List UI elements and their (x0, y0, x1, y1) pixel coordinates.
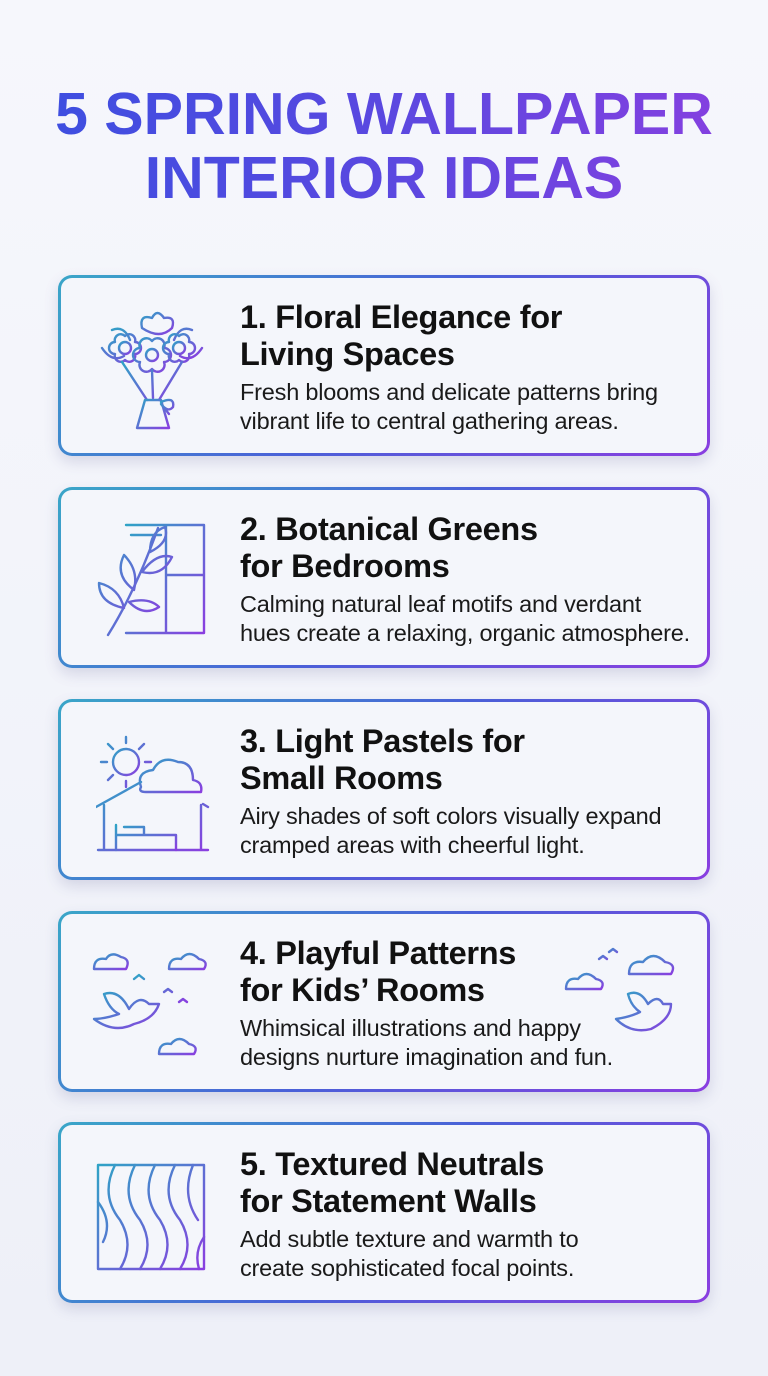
icon: sun cloud room (96, 736, 210, 852)
heading (240, 511, 538, 584)
text: Calming natural leaf motifs and verdant (240, 591, 641, 617)
heading: for Statement Walls (240, 1183, 536, 1219)
heading: Living Spaces (240, 336, 455, 372)
text: Fresh blooms and delicate patterns bring (240, 379, 658, 405)
heading: Small Rooms (240, 760, 443, 796)
icon: textured square (96, 1164, 206, 1270)
text: designs nurture imagination and fun. (240, 1044, 613, 1070)
text (240, 1226, 578, 1281)
text: create sophisticated focal points. (240, 1255, 574, 1281)
heading: 4. Playful Patterns (240, 935, 516, 971)
panel: botanical greens (58, 487, 710, 668)
panel: light pastels (58, 699, 710, 880)
text (240, 591, 690, 646)
title: INTERIOR IDEAS (145, 145, 623, 211)
text (240, 803, 661, 858)
text: cramped areas with cheerful light. (240, 832, 585, 858)
heading: for Bedrooms (240, 548, 449, 584)
panel: floral elegance (58, 275, 710, 456)
icon: bouquet (100, 312, 204, 430)
panel: textured neutrals (58, 1122, 710, 1303)
heading: for Kids’ Rooms (240, 972, 485, 1008)
icon: birds and clouds right (564, 948, 674, 1032)
title: 5 SPRING WALLPAPER (55, 81, 713, 147)
heading: 1. Floral Elegance for (240, 299, 562, 335)
icon: birds and clouds left (92, 952, 207, 1056)
panel: playful patterns (58, 911, 710, 1092)
text: Add subtle texture and warmth to (240, 1226, 578, 1252)
icon: leaves and window (98, 524, 206, 636)
heading (240, 299, 562, 372)
text: hues create a relaxing, organic atmosphere. (240, 620, 690, 646)
heading (240, 723, 525, 796)
heading: 5. Textured Neutrals (240, 1146, 544, 1182)
heading (240, 1146, 544, 1219)
text: Airy shades of soft colors visually expand (240, 803, 661, 829)
text: vibrant life to central gathering areas. (240, 408, 619, 434)
heading: 2. Botanical Greens (240, 511, 538, 547)
text (240, 379, 658, 434)
text (240, 1015, 613, 1070)
text: Whimsical illustrations and happy (240, 1015, 581, 1041)
title (0, 82, 768, 210)
heading (240, 935, 516, 1008)
heading: 3. Light Pastels for (240, 723, 525, 759)
